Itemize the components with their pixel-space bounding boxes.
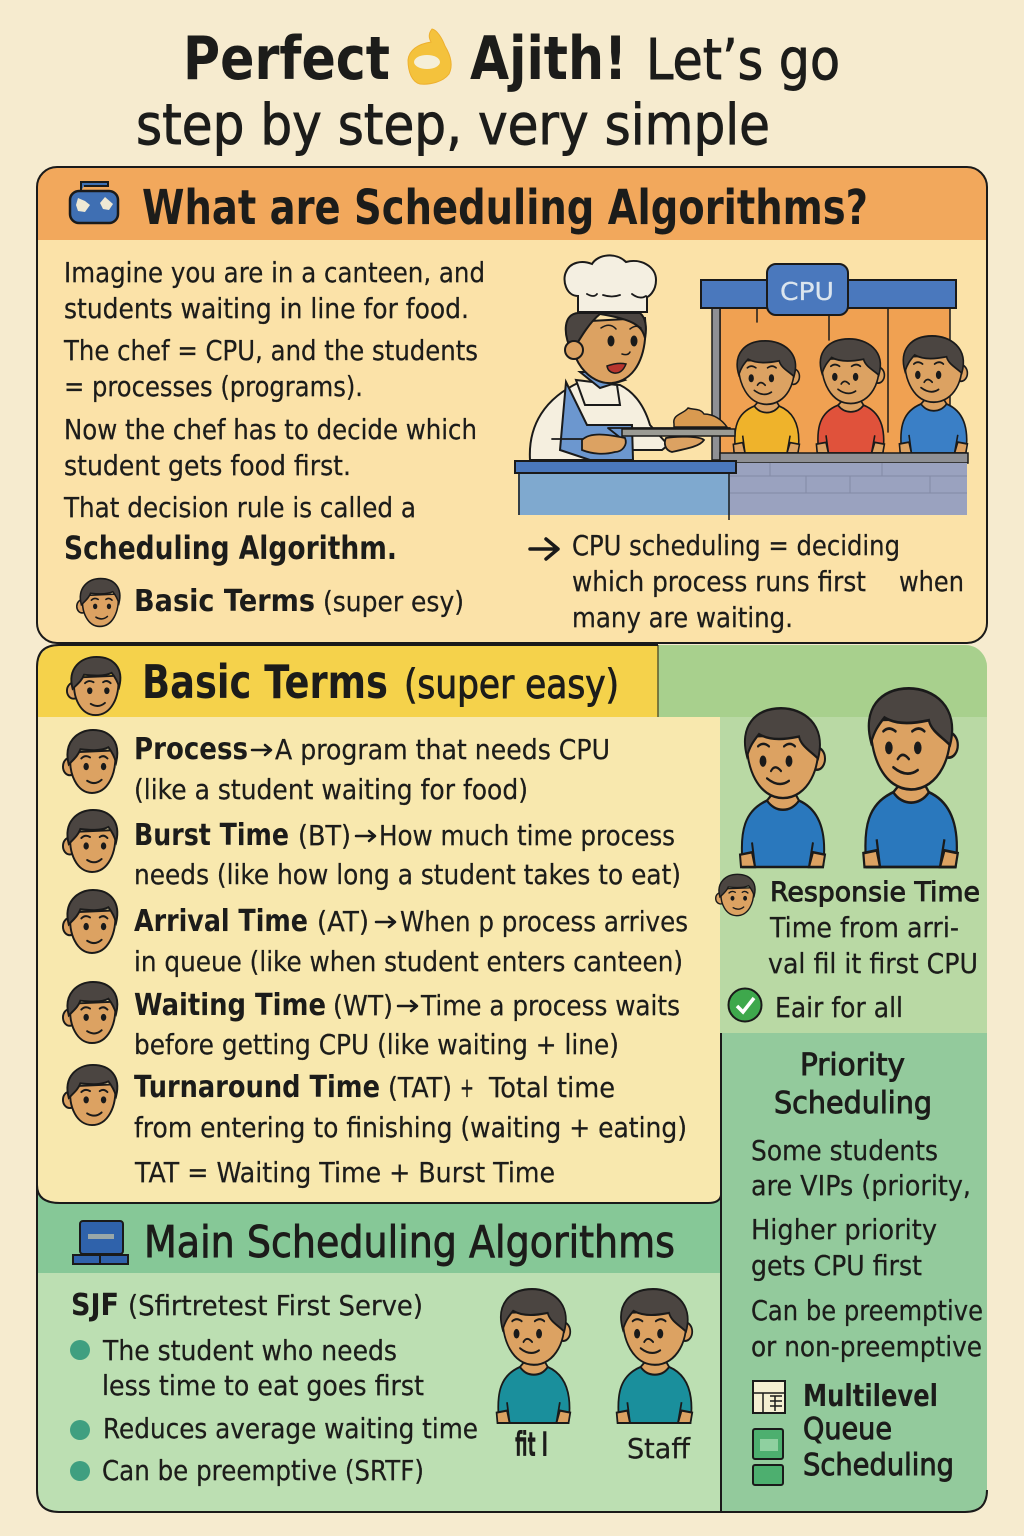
text block: canteen analogy: students waiting in line for food. [64, 292, 469, 325]
term: turnaround time: (TAT) [388, 1071, 452, 1104]
heading: multilevel queue scheduling: Scheduling [803, 1448, 954, 1483]
heading: multilevel queue scheduling [803, 1379, 954, 1483]
text block: priority details: or non-preemptive [751, 1330, 982, 1363]
term: process: Process [134, 732, 248, 767]
term: process: A program that needs CPU [275, 733, 610, 766]
text block: CPU scheduling definition: when [899, 565, 964, 598]
chef hat [564, 255, 656, 312]
text block: CPU scheduling definition [572, 529, 964, 634]
icon: ok hand [408, 29, 451, 84]
basic terms note: Basic Terms [134, 584, 315, 619]
term: turnaround time: from entering to finishing (waiting + eating) [134, 1111, 687, 1144]
title: Perfect [183, 24, 390, 94]
heading: multilevel queue scheduling: Multilevel [803, 1379, 938, 1414]
heading: What are Scheduling Algorithms? [142, 180, 868, 236]
tray and food [674, 408, 727, 427]
text block: canteen analogy: The chef = CPU, and the students [63, 334, 478, 367]
term: arrival time: in queue (like when student enters canteen) [134, 945, 683, 978]
text block: CPU scheduling definition: which process runs first [572, 565, 866, 598]
title [136, 24, 840, 158]
text block: canteen analogy: That decision rule is called a [63, 491, 416, 524]
term: burst time: (BT) [298, 819, 351, 852]
term: waiting time: Waiting Time [134, 988, 326, 1023]
text block: CPU scheduling definition: CPU scheduling = deciding [572, 529, 900, 562]
basic terms note [134, 584, 464, 619]
chef [530, 255, 735, 460]
icons: multilevel queue [753, 1381, 785, 1485]
sign: CPU [767, 264, 848, 315]
term: turnaround time: + [460, 1071, 474, 1104]
text block: priority details: Some students [751, 1134, 938, 1167]
booth [701, 280, 956, 460]
text block: canteen analogy: Scheduling Algorithm. [64, 529, 397, 567]
icon: boy head [77, 579, 120, 626]
heading: priority scheduling: Priority [800, 1048, 905, 1083]
label: fit I: fit I [515, 1425, 548, 1465]
icon: computer [73, 1221, 128, 1264]
student: teal shirt left [497, 1289, 570, 1423]
term: process: (like a student waiting for food) [134, 773, 528, 806]
label: fair for all: Eair for all [775, 991, 903, 1024]
student: blue shirt left [740, 708, 825, 867]
title: Ajith! [470, 24, 627, 94]
term: burst time: Burst Time [134, 818, 289, 853]
student: blue shirt right [863, 688, 958, 867]
text block: priority details: Higher priority [751, 1213, 937, 1246]
term: arrival time: (AT) [317, 905, 369, 938]
heading: basic terms: (super easy) [404, 662, 619, 708]
text block: SJF: Can be preemptive (SRTF) [102, 1454, 424, 1487]
term: burst time [63, 810, 681, 891]
text block: priority details: gets CPU first [751, 1249, 922, 1282]
icon: radio [70, 182, 118, 223]
arrow [530, 539, 558, 559]
text block: canteen analogy: student gets food first. [64, 449, 351, 482]
text block: response time [768, 877, 980, 980]
text block: canteen analogy: Imagine you are in a canteen, and [64, 256, 485, 289]
text block: SJF: SJF [71, 1288, 119, 1323]
term: waiting time [63, 982, 680, 1061]
term: arrival time [63, 890, 688, 978]
term: turnaround time: Turnaround Time [134, 1070, 380, 1105]
text block: priority details: are VIPs (priority, [751, 1169, 971, 1202]
icon: boy head [67, 657, 120, 715]
text block: priority details [751, 1134, 983, 1363]
icon: green check [728, 988, 762, 1022]
counter top [515, 461, 736, 473]
student: blue shirt [899, 336, 967, 453]
student: teal shirt right [617, 1289, 692, 1423]
term: burst time: How much time process [379, 819, 675, 852]
text block: SJF [70, 1288, 478, 1487]
basic terms note: (super esy) [323, 585, 464, 618]
heading: basic terms: Basic Terms [142, 655, 388, 709]
title: Let’s go [646, 28, 840, 93]
student: red shirt [816, 339, 884, 453]
heading: priority scheduling: Scheduling [774, 1086, 932, 1121]
heading: main scheduling algorithms: Main Scheduling Algorithms [144, 1217, 675, 1268]
text block: priority details: Can be preemptive [751, 1294, 983, 1327]
text block: SJF: less time to eat goes first [102, 1369, 424, 1402]
term: turnaround time [63, 1065, 687, 1189]
illustration: chef serving students at CPU counter [515, 255, 968, 520]
term: waiting time: Time a process waits [420, 989, 680, 1022]
panel: basic terms and algorithms [37, 645, 987, 1513]
text block: response time: Responsie Time [770, 877, 980, 908]
term: waiting time: (WT) [333, 989, 393, 1022]
text block: response time: val fil it first CPU [768, 947, 978, 980]
term: waiting time: before getting CPU (like waiting + line) [134, 1028, 619, 1061]
heading: basic terms [142, 655, 619, 709]
term: turnaround time: Total time [488, 1071, 615, 1104]
panel: what are scheduling algorithms [37, 167, 987, 643]
text block: canteen analogy: = processes (programs). [64, 370, 363, 403]
term: arrival time: Arrival Time [134, 904, 308, 939]
term: burst time: needs (like how long a student takes to eat) [134, 858, 681, 891]
term: turnaround time: TAT = Waiting Time + Burst Time [134, 1156, 555, 1189]
student: yellow shirt [733, 341, 799, 453]
text block: SJF: Reduces average waiting time [103, 1412, 478, 1445]
title: step by step, very simple [136, 93, 770, 158]
text block: canteen analogy: Now the chef has to decide which [64, 413, 477, 446]
text block: response time: Time from arri- [769, 911, 959, 944]
icon: small boy head [716, 874, 755, 916]
counter [518, 453, 968, 520]
text block: CPU scheduling definition: many are waiting. [572, 601, 793, 634]
text block: SJF: The student who needs [102, 1334, 397, 1367]
text block: SJF: (Sfirtretest First Serve) [128, 1289, 423, 1322]
text block: canteen analogy [63, 256, 485, 567]
sign: CPU: CPU [780, 277, 834, 306]
heading: multilevel queue scheduling: Queue [803, 1412, 892, 1447]
heading: priority scheduling [774, 1048, 932, 1121]
label: staff: Staff [627, 1432, 691, 1465]
term: arrival time: When p process arrives [400, 905, 688, 938]
term: process [63, 730, 610, 806]
